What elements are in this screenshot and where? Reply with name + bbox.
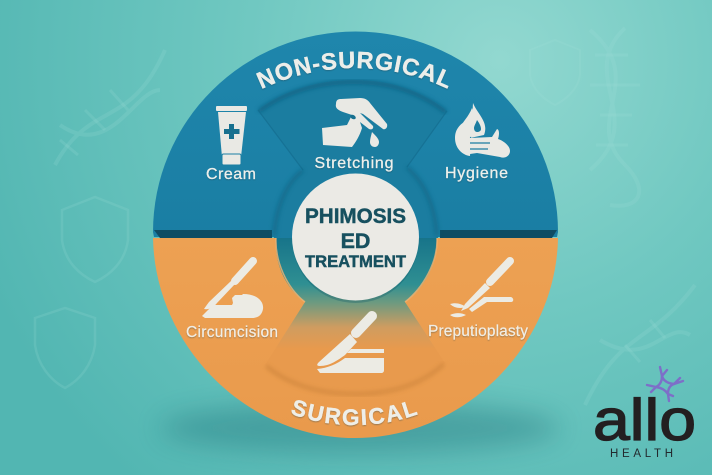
- hub disc: [292, 177, 418, 303]
- label: cream: Cream: [206, 166, 256, 183]
- stretching recess: [258, 80, 447, 238]
- icon: hygiene hands and drop: [455, 103, 510, 158]
- centre ring shade: [274, 167, 437, 236]
- panel: non-surgical half: [153, 32, 558, 238]
- hub title: [305, 204, 406, 271]
- label: circumcision: Circumcision: [186, 324, 278, 341]
- logo: allo health: [593, 367, 696, 460]
- icon: circumcision scalpel: [202, 261, 263, 318]
- icon: central scalpel: [317, 316, 384, 373]
- icon: stretching hand: [322, 98, 387, 147]
- recess inner edge: [259, 82, 446, 112]
- label: preputioplasty: Preputioplasty: [428, 323, 528, 340]
- hub title: TREATMENT: [305, 253, 406, 271]
- hub title: ED: [341, 229, 370, 253]
- heading: surgical: SURGICAL: [291, 400, 418, 427]
- heading: non-surgical: NON-SURGICAL: [256, 52, 448, 90]
- label: stretching: Stretching: [314, 155, 394, 172]
- logo subtitle: HEALTH: [610, 448, 673, 460]
- icon: preputioplasty scalpel: [450, 261, 513, 317]
- recess inner edge: [266, 364, 444, 394]
- lower edge shadow: [154, 230, 557, 238]
- icon: cream tube: [216, 106, 247, 165]
- logo mark: [647, 367, 683, 401]
- label: hygiene: Hygiene: [445, 165, 508, 182]
- panel: centre hub: [292, 174, 419, 303]
- orange half body: [153, 238, 558, 438]
- logo wordmark: allo: [593, 388, 696, 453]
- centre well: [265, 238, 445, 393]
- panel: surgical half: [153, 238, 558, 438]
- hub title: PHIMOSIS: [305, 204, 406, 228]
- blue half body: [153, 32, 558, 237]
- decorative DNA and shield watermarks: [35, 28, 695, 405]
- disc drop shadow: [160, 402, 560, 454]
